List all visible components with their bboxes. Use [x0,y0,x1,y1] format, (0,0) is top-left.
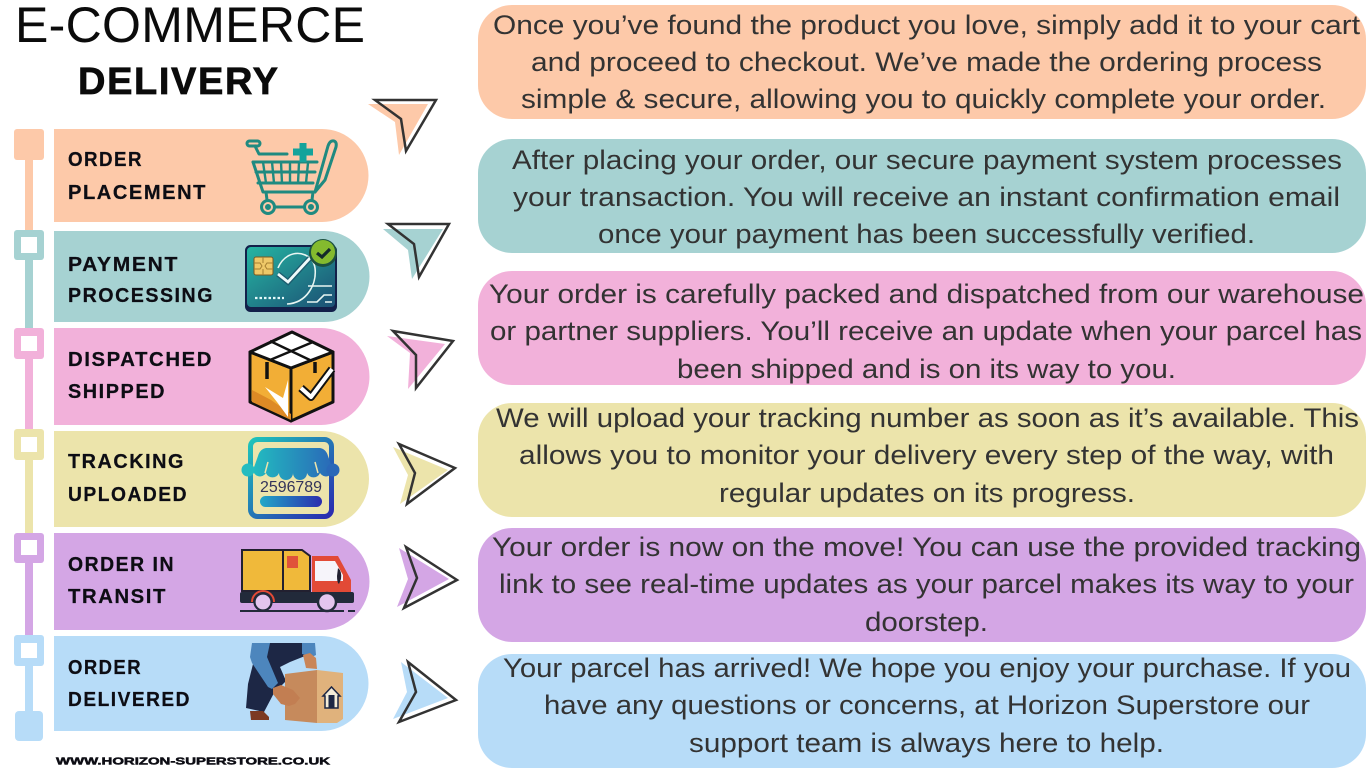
timeline spine [14,129,44,741]
description text: link to see real-time updates as your parcel makes its way to your [499,569,1354,599]
label: order placement: ORDER [68,148,143,171]
description text [503,653,1351,758]
label: order delivered: DELIVERED [68,688,191,711]
icon: delivery truck [240,550,355,611]
arrow: step 5 [397,547,457,608]
description text: We will upload your tracking number as soon as it’s available. This [496,403,1359,433]
description text: allows you to monitor your delivery every step of the way, with [519,440,1334,470]
description text: once your payment has been successfully verified. [598,219,1255,249]
footer url: WWW.HORIZON-SUPERSTORE.CO.UK [56,756,331,768]
description text: been shipped and is on its way to you. [677,354,1176,384]
description text [512,145,1342,249]
label: tracking uploaded: UPLOADED [68,483,188,506]
panel: in transit description [478,528,1366,642]
panel: dispatched shipped [54,328,369,425]
label: payment processing: PAYMENT [68,253,179,276]
arrow: step 2 [383,224,449,279]
description text: have any questions or concerns, at Horizon Superstore our [544,690,1310,720]
label: payment processing: PROCESSING [68,284,214,307]
description text: Your order is carefully packed and dispatched from our warehouse [489,279,1364,309]
label: order in transit: ORDER IN [68,553,175,576]
description text: Your parcel has arrived! We hope you enjoy your purchase. If you [503,653,1351,683]
description text [492,532,1361,637]
description text: or partner suppliers. You’ll receive an update when your parcel has [490,316,1362,346]
label: dispatched shipped: DISPATCHED [68,348,213,371]
description text [493,10,1361,114]
icon: shopping cart [247,141,336,214]
label: order in transit [68,553,175,608]
panel: order delivered [54,636,368,731]
label: tracking uploaded: TRACKING [68,450,185,473]
title: DELIVERY [78,61,278,103]
description text [489,279,1364,384]
arrow: step 6 [393,662,456,722]
panel: payment processing description [478,139,1366,253]
description text: Your order is now on the move! You can use the provided tracking [492,532,1361,562]
panel: tracking uploaded [54,431,369,527]
description text: simple & secure, allowing you to quickly complete your order. [521,84,1326,114]
description text: Once you’ve found the product you love, simply add it to your cart [493,10,1361,40]
label: order in transit: TRANSIT [68,585,167,608]
arrow: step 3 [387,331,453,389]
panel: order placement [54,129,368,222]
icon: parcel box with tick [250,332,333,421]
panel: tracking description [478,403,1366,517]
description text: your transaction. You will receive an instant confirmation email [513,182,1340,212]
icon: tracking shop [242,440,340,516]
label: dispatched shipped: SHIPPED [68,380,166,403]
arrow: step 4 [393,444,455,504]
label: dispatched shipped [68,348,213,403]
panel: payment processing [54,231,370,322]
panel: delivered description [478,653,1366,768]
label: order delivered: ORDER [68,656,142,679]
label: order delivered [68,656,191,711]
title [15,0,365,103]
panel: order placement description [478,5,1366,119]
label: payment processing [68,253,214,307]
description text: and proceed to checkout. We’ve made the ordering process [531,47,1322,77]
label: tracking uploaded [68,450,188,506]
description text: doorstep. [865,607,988,637]
icon: credit card [246,239,337,312]
description text: support team is always here to help. [689,728,1164,758]
description text: After placing your order, our secure payment system processes [512,145,1342,175]
label: order placement [68,148,207,204]
label: order placement: PLACEMENT [68,181,207,204]
icon: tracking shop: 2596789 [260,479,322,496]
description text [496,403,1359,508]
description text: regular updates on its progress. [719,478,1135,508]
arrow: step 1 [368,100,436,155]
panel: order in transit [54,533,370,630]
icon: courier with parcel [246,643,343,723]
panel: dispatched description [478,271,1366,385]
